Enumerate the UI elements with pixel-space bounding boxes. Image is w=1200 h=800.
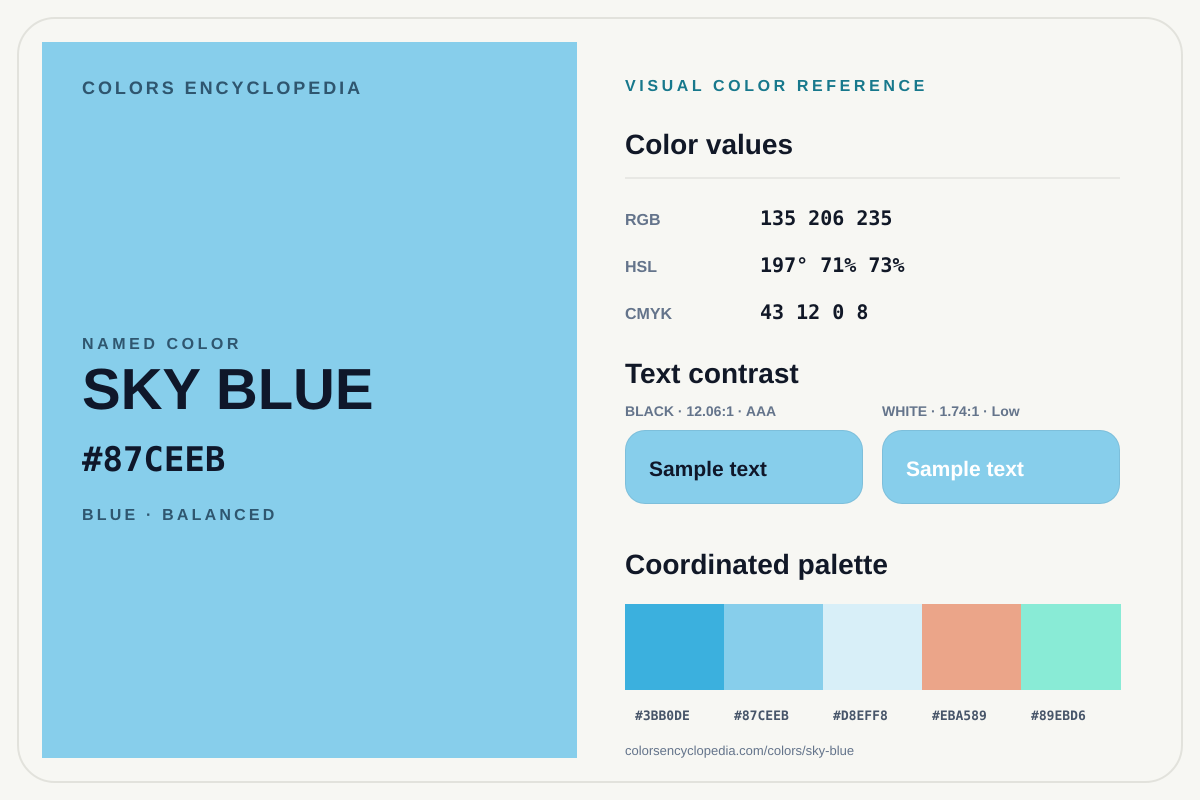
named color label: NAMED COLOR xyxy=(82,336,242,353)
CMYK row: CMYK xyxy=(625,306,672,323)
color family: BLUE · BALANCED xyxy=(82,507,278,524)
palette swatches xyxy=(625,604,1121,690)
color name: SKY BLUE xyxy=(82,357,373,422)
RGB row xyxy=(625,206,892,230)
black sample: Sample text xyxy=(649,458,767,481)
RGB row: 135 206 235 xyxy=(760,206,892,230)
HSL row: HSL xyxy=(625,259,657,276)
white contrast label: WHITE · 1.74:1 · Low xyxy=(882,403,1020,419)
RGB row: RGB xyxy=(625,212,661,229)
palette hex labels: #3BB0DE xyxy=(635,709,690,724)
palette hex labels: #EBA589 xyxy=(932,709,987,724)
panel: color hero xyxy=(42,42,577,758)
heading: text contrast: Text contrast xyxy=(625,358,799,389)
HSL row xyxy=(625,253,904,277)
black sample xyxy=(625,430,863,504)
HSL row: 197° 71% 73% xyxy=(760,253,904,277)
palette hex labels: #87CEEB xyxy=(734,709,789,724)
heading: color values: Color values xyxy=(625,129,793,160)
white sample xyxy=(882,430,1120,504)
black contrast label: BLACK · 12.06:1 · AAA xyxy=(625,403,776,419)
brand label: COLORS ENCYCLOPEDIA xyxy=(82,78,363,98)
color values table xyxy=(625,206,904,324)
section eyebrow: VISUAL COLOR REFERENCE xyxy=(625,78,928,95)
heading: coordinated palette: Coordinated palette xyxy=(625,549,888,580)
source url: colorsencyclopedia.com/colors/sky-blue xyxy=(625,743,854,758)
CMYK row xyxy=(625,300,868,324)
white sample: Sample text xyxy=(906,458,1024,481)
palette hex labels xyxy=(635,709,1086,724)
hex code: #87CEEB xyxy=(82,440,225,480)
CMYK row: 43 12 0 8 xyxy=(760,300,868,324)
palette hex labels: #D8EFF8 xyxy=(833,709,888,724)
palette hex labels: #89EBD6 xyxy=(1031,709,1086,724)
